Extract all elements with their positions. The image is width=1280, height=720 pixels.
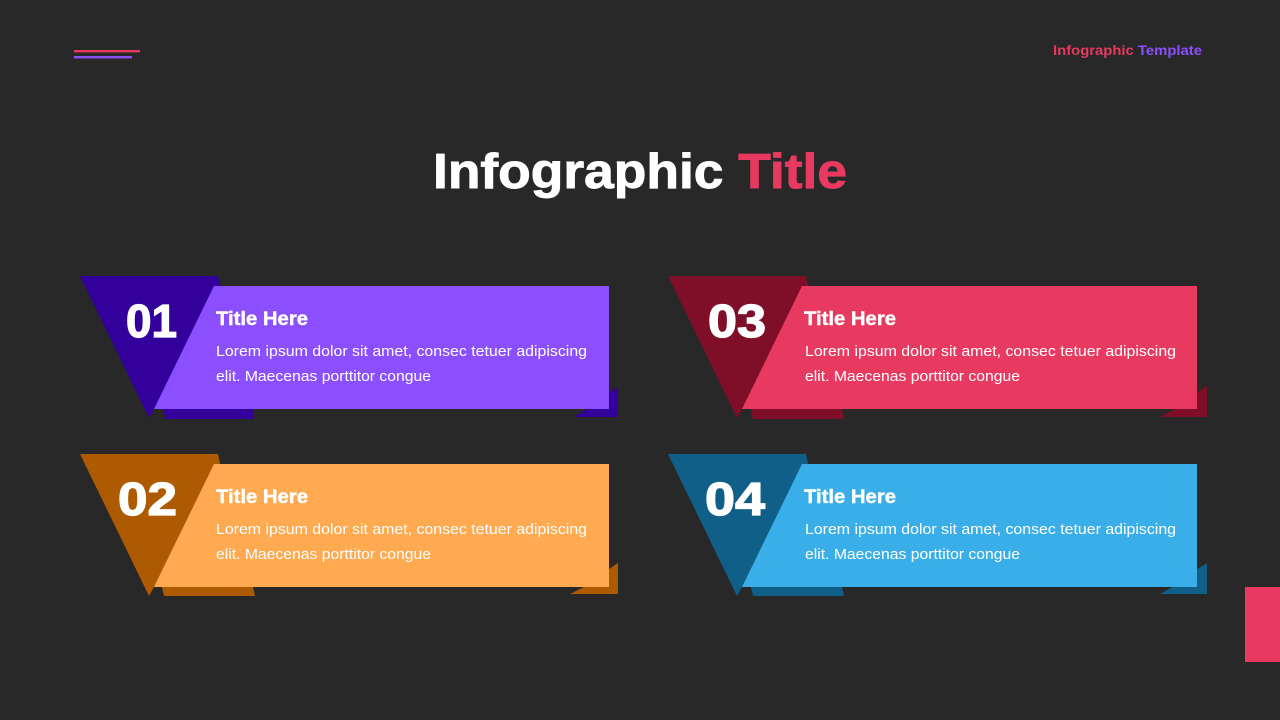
body text 03: Lorem ipsum dolor sit amet, consec tetuer adipiscing [805, 344, 1176, 360]
body text 04: elit. Maecenas porttitor congue [805, 547, 1020, 563]
body text 03: elit. Maecenas porttitor congue [805, 369, 1020, 385]
bottom shadow 01 [161, 405, 254, 419]
card body 03 [742, 286, 1197, 409]
number triangle 02 [80, 454, 221, 596]
body text 01 [216, 344, 587, 385]
body text 04: Lorem ipsum dolor sit amet, consec tetuer adipiscing [805, 522, 1176, 538]
card body 01 [154, 286, 609, 409]
header decoration lines [74, 50, 140, 58]
bottom shadow 02 [161, 583, 255, 596]
heading 04: Title Here [804, 487, 896, 508]
body text 02 [216, 522, 587, 563]
heading 01: Title Here [216, 309, 308, 330]
corner shadow 03 [1160, 386, 1207, 417]
panel: card 01 [80, 276, 618, 419]
corner shadow 01 [574, 387, 618, 417]
body text 01: elit. Maecenas porttitor congue [216, 369, 431, 385]
header label: Infographic Template [1053, 43, 1203, 58]
panel: card 04 [668, 454, 1207, 596]
number 02: 02 [118, 473, 177, 525]
heading 02: Title Here [216, 487, 308, 508]
bottom shadow 03 [750, 405, 844, 419]
page marker block [1245, 587, 1280, 662]
body text 04 [805, 522, 1176, 563]
heading 03: Title Here [804, 309, 896, 330]
bottom shadow 04 [750, 583, 844, 596]
number triangle 03 [668, 276, 809, 418]
number 03: 03 [708, 295, 766, 347]
card body 02 [154, 464, 609, 587]
number triangle 01 [80, 276, 221, 418]
number 04: 04 [705, 473, 765, 525]
panel: card 02 [80, 454, 618, 596]
corner shadow 02 [570, 563, 618, 594]
number triangle 04 [668, 454, 809, 596]
title: Infographic Title [433, 145, 847, 199]
body text 03 [805, 344, 1176, 385]
body text 02: Lorem ipsum dolor sit amet, consec tetuer adipiscing [216, 522, 587, 538]
corner shadow 04 [1160, 563, 1207, 594]
body text 01: Lorem ipsum dolor sit amet, consec tetuer adipiscing [216, 344, 587, 360]
card body 04 [742, 464, 1197, 587]
body text 02: elit. Maecenas porttitor congue [216, 547, 431, 563]
number 01: 01 [126, 295, 177, 347]
panel: card 03 [668, 276, 1207, 419]
